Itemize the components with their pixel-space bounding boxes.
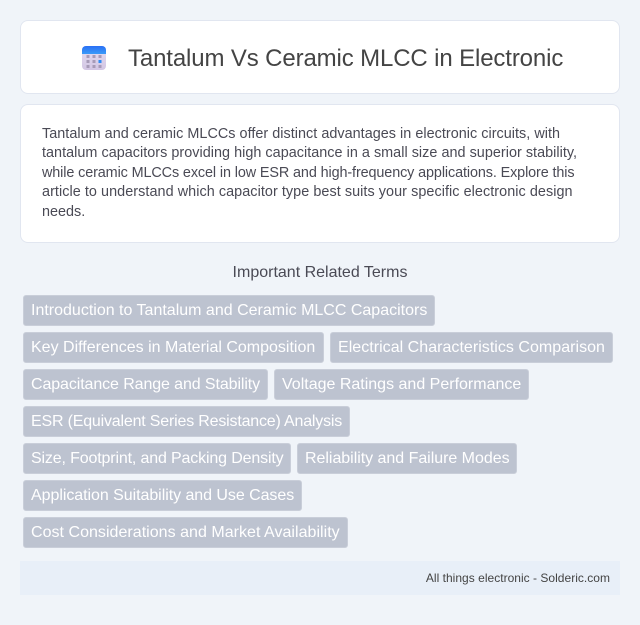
tag	[23, 406, 350, 437]
footer bar	[20, 561, 620, 595]
tag	[23, 517, 348, 548]
tag: Application Suitability and Use Cases	[31, 487, 294, 504]
tag	[23, 332, 324, 363]
tag: Reliability and Failure Modes	[305, 450, 510, 467]
intro text	[42, 126, 577, 220]
tag list	[23, 295, 613, 548]
footer text: All things electronic - Solderic.com	[426, 571, 610, 585]
tag	[23, 443, 291, 474]
tag: Introduction to Tantalum and Ceramic MLCC Capacitors	[31, 302, 427, 319]
tag: Voltage Ratings and Performance	[282, 376, 521, 393]
header panel	[20, 20, 620, 94]
intro panel	[20, 104, 620, 243]
icon: calendar	[82, 46, 106, 70]
tag: Key Differences in Material Composition	[31, 339, 315, 356]
intro text: article to understand which capacitor type best suits your specific electronic design	[42, 184, 573, 200]
intro text: while ceramic MLCCs excel in low ESR and high-frequency applications. Explore this	[42, 165, 574, 181]
tag	[23, 369, 268, 400]
tag: ESR (Equivalent Series Resistance) Analysis	[31, 413, 342, 430]
tag	[274, 369, 529, 400]
tag: Capacitance Range and Stability	[31, 376, 260, 393]
tag	[297, 443, 517, 474]
tag	[330, 332, 613, 363]
intro text: Tantalum and ceramic MLCCs offer distinct advantages in electronic circuits, with	[42, 126, 560, 142]
title: Tantalum Vs Ceramic MLCC in Electronic	[128, 45, 563, 72]
intro text: needs.	[42, 204, 85, 220]
tag	[23, 480, 302, 511]
tag: Electrical Characteristics Comparison	[338, 339, 605, 356]
tag	[23, 295, 435, 326]
tag: Cost Considerations and Market Availability	[31, 524, 340, 541]
tag: Size, Footprint, and Packing Density	[31, 450, 284, 467]
intro text: tantalum capacitors providing high capacitance in a small size and superior stability,	[42, 145, 577, 161]
section heading: Important Related Terms	[233, 264, 407, 281]
